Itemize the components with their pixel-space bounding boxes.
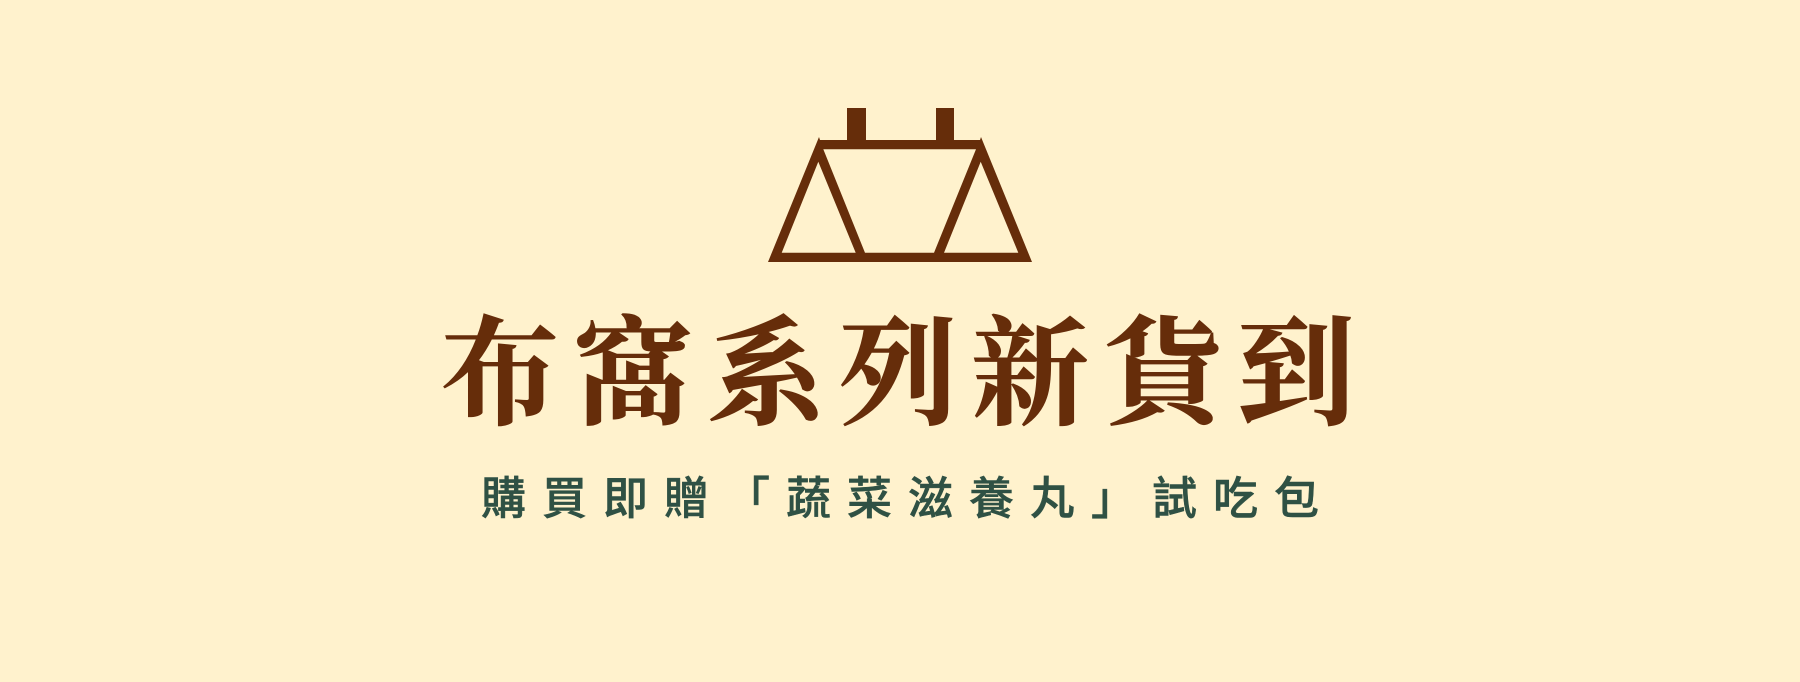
icon: bag logo bbox=[768, 108, 1032, 262]
subtitle: 購買即贈「蔬菜滋養丸」試吃包 bbox=[481, 473, 1335, 524]
title: 布窩系列新貨到 bbox=[441, 310, 1369, 441]
